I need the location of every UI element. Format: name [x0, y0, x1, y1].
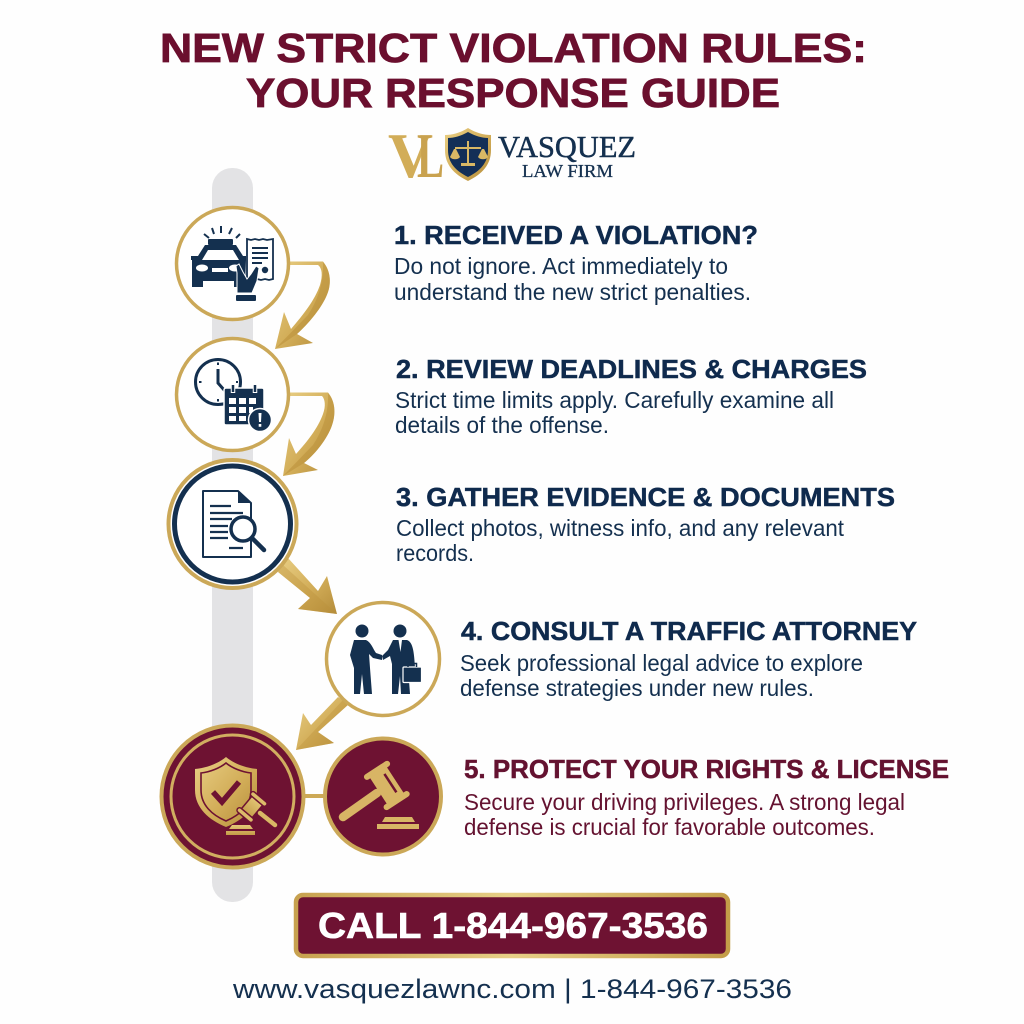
- icon: handshake with briefcase: [350, 624, 422, 694]
- heading: 3. GATHER EVIDENCE & DOCUMENTS: [396, 482, 895, 512]
- body: Seek professional legal advice to explore: [460, 650, 863, 676]
- step 5 text: defense is crucial for favorable outcomes.: [464, 814, 875, 840]
- title: [160, 25, 867, 116]
- logo: Vasquez Law Firm: V: [388, 120, 433, 191]
- title: YOUR RESPONSE GUIDE: [246, 70, 780, 116]
- footer contact line: www.vasquezlawnc.com | 1-844-967-3536: [232, 974, 792, 1004]
- icon: shield with check and gavel: [195, 757, 275, 835]
- title: NEW STRICT VIOLATION RULES:: [160, 25, 867, 71]
- step 4 circle: [326, 602, 440, 716]
- step 1 text: [394, 220, 758, 305]
- call button: CALL 1-844-967-3536: [318, 905, 708, 946]
- icon: police car and ticket: [191, 226, 273, 301]
- icon: gavel: [343, 760, 419, 829]
- step 1 text: understand the new strict penalties.: [394, 279, 751, 305]
- icon: clock and calendar: [196, 360, 272, 432]
- heading: 1. RECEIVED A VIOLATION?: [394, 220, 758, 250]
- arrow: step 4 to 5: [296, 697, 349, 750]
- step 5 text: [464, 754, 949, 840]
- body: Strict time limits apply. Carefully examine all: [395, 387, 834, 413]
- body: Secure your driving privileges. A strong legal: [464, 789, 905, 815]
- step 4 text: defense strategies under new rules.: [460, 675, 814, 701]
- logo: Vasquez Law Firm: LAW FIRM: [522, 161, 613, 181]
- step 3 text: records.: [396, 540, 474, 566]
- logo: Vasquez Law Firm: VASQUEZ: [498, 129, 636, 164]
- step 1 circle: [176, 208, 288, 320]
- step 3 text: [396, 482, 895, 566]
- step 2 text: details of the offense.: [395, 412, 609, 438]
- step 5 main circle: [162, 726, 304, 868]
- call button: [296, 895, 728, 956]
- arrow: step 2 to 3: [283, 392, 334, 476]
- step 2 circle: [176, 338, 288, 450]
- logo: Vasquez Law Firm: [388, 120, 636, 191]
- heading: 4. CONSULT A TRAFFIC ATTORNEY: [461, 616, 917, 646]
- body: Do not ignore. Act immediately to: [394, 253, 728, 279]
- vertical timeline track: [212, 168, 253, 902]
- icon: document and magnifier: [203, 491, 264, 557]
- arrow: step 1 to 2: [275, 262, 330, 349]
- logo: Vasquez Law Firm: L: [417, 120, 444, 191]
- heading: 2. REVIEW DEADLINES & CHARGES: [396, 354, 867, 384]
- step 4 text: [460, 616, 917, 701]
- arrow: step 3 to 4: [278, 558, 337, 614]
- body: Collect photos, witness info, and any relevant: [396, 515, 845, 541]
- step 3 circle: [168, 460, 296, 588]
- step 5 secondary circle: [325, 738, 441, 854]
- heading: 5. PROTECT YOUR RIGHTS & LICENSE: [464, 754, 949, 784]
- step 2 text: [395, 354, 867, 438]
- connector between step 5 circles: [303, 794, 325, 798]
